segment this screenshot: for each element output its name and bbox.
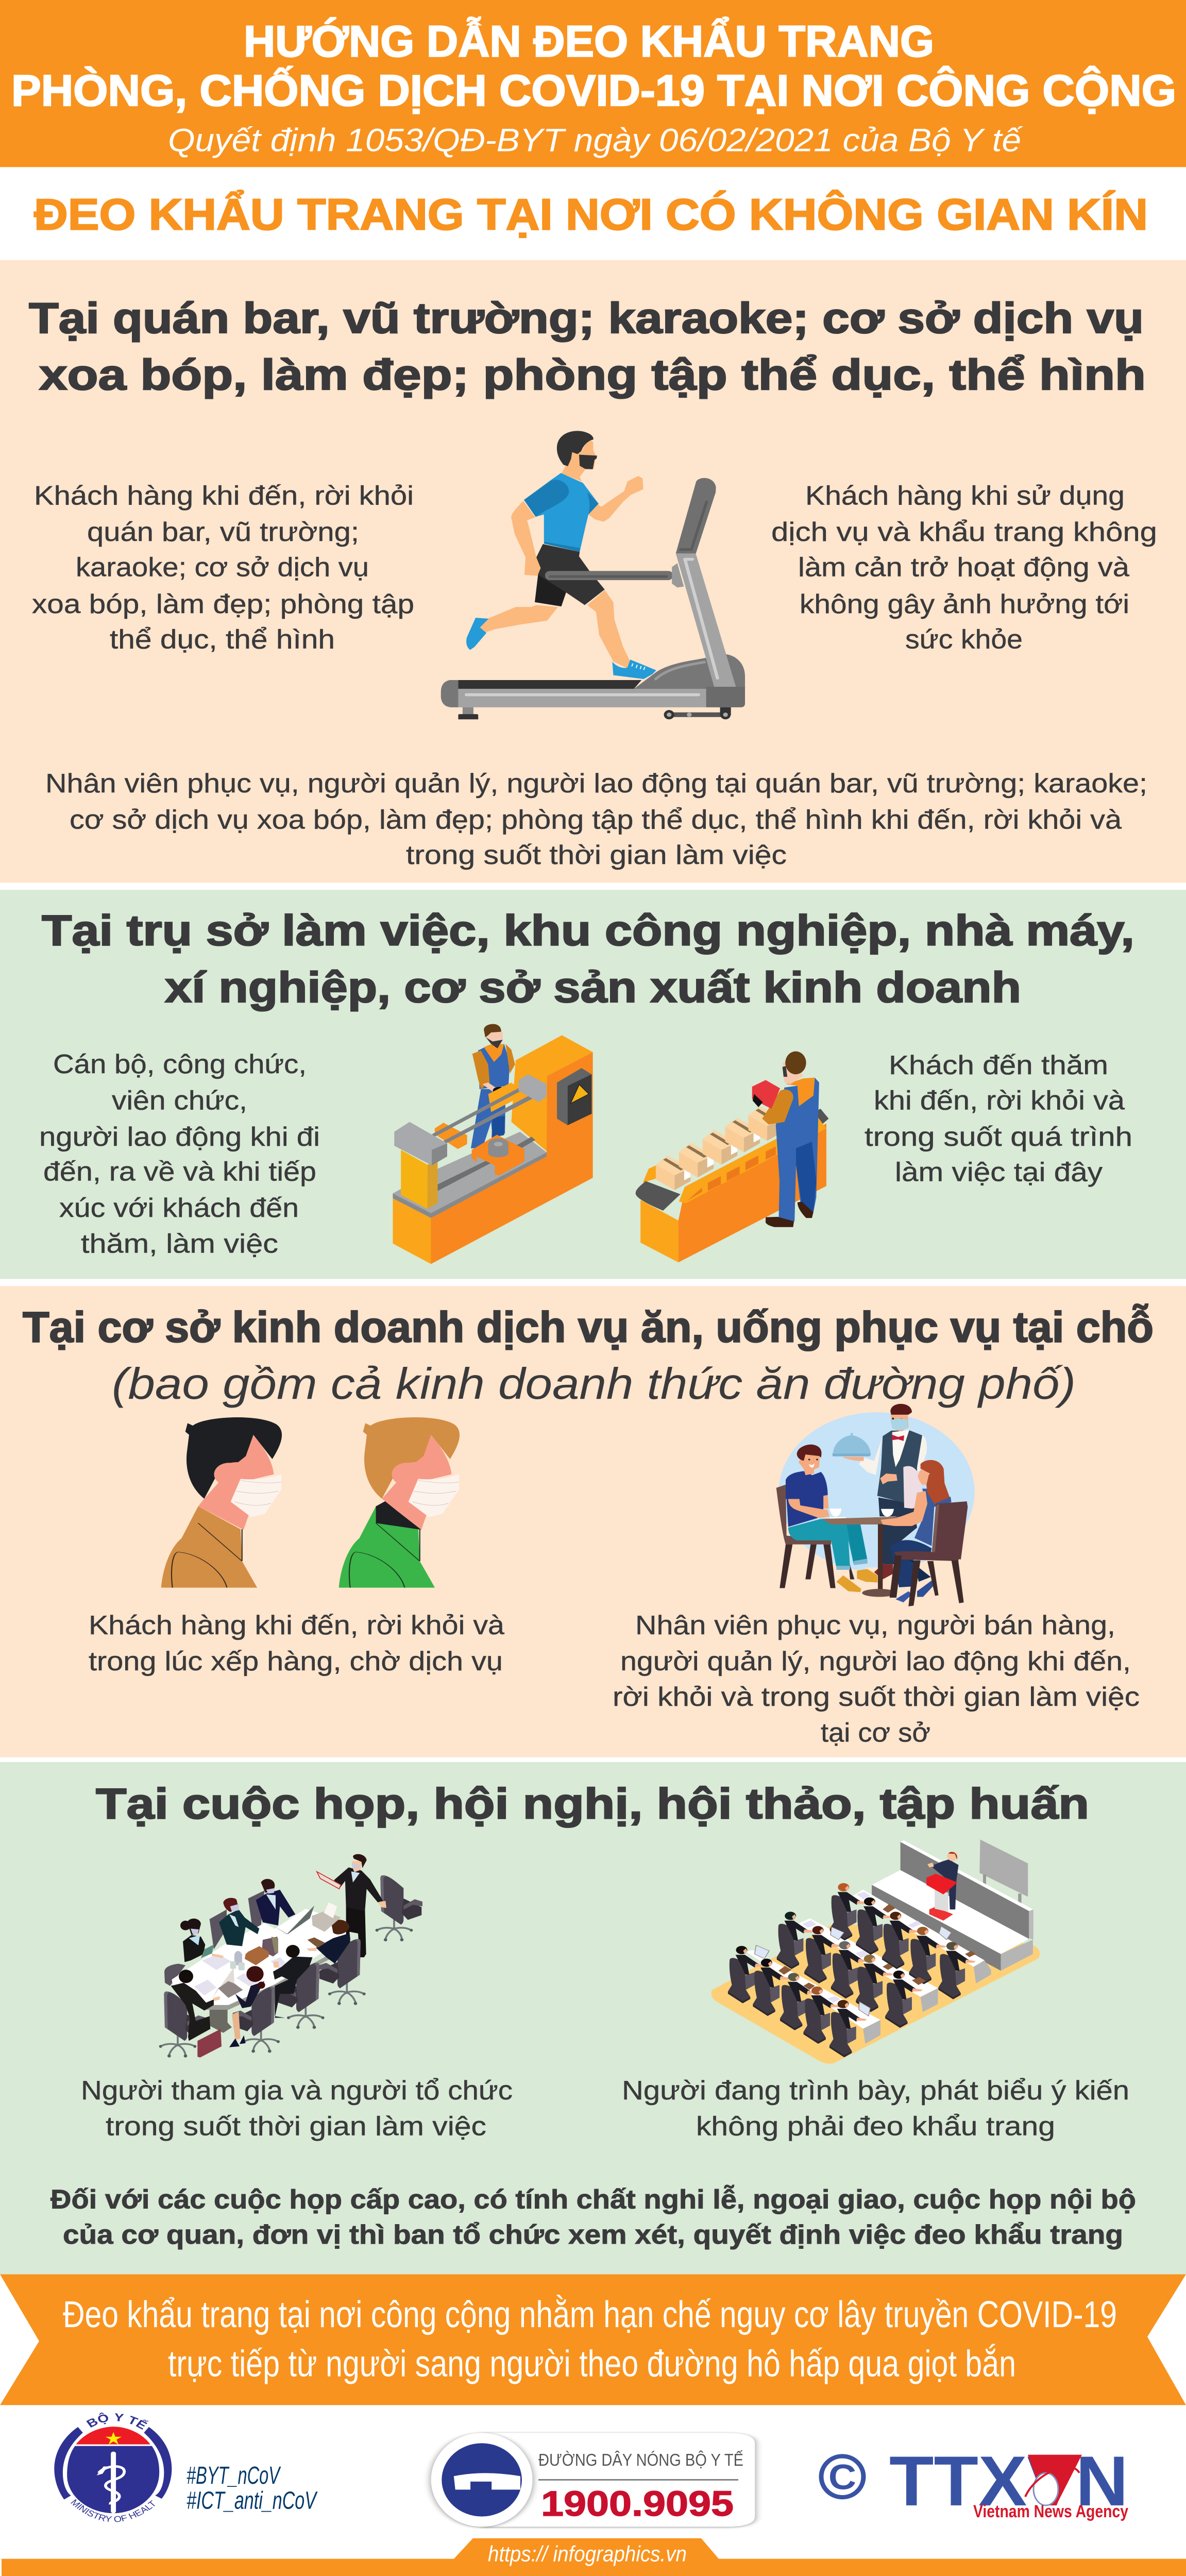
panel heading: Tại trụ sở làm việc, khu công nghiệp, nhà máy, [42,907,1134,955]
text block: participants: trong suốt thời gian làm việc [106,2112,486,2141]
panel heading [42,907,1134,1011]
text block: customers using services: làm cản trở hoạt động và [798,552,1130,582]
text block: staff: cơ sở dịch vụ xoa bóp, làm đẹp; phòng tập thể dục, thể hình khi đến, rời khỏi và [70,805,1122,835]
icon: TTXVN logo: TTXVN [889,2442,1128,2521]
text block: customers arriving: Khách hàng khi đến, rời khỏi [34,481,414,511]
text block: workers: thăm, làm việc [81,1229,278,1259]
hashtags: #ICT_anti_nCoV [187,2486,318,2514]
text block: workers: Cán bộ, công chức, [53,1049,307,1079]
text block: workers: xúc với khách đến [59,1193,299,1223]
text block: customers using services: Khách hàng khi sử dụng [805,481,1125,511]
text block: customers arriving: quán bar, vũ trường; [87,517,359,547]
callout: ribbon banner [0,2274,1186,2405]
text block: customers arriving: karaoke; cơ sở dịch vụ [76,552,369,582]
front tables [851,1890,985,1967]
title line one: HƯỚNG DẪN ĐEO KHẨU TRANG [244,16,934,66]
panel: offices and factories [0,890,1186,1279]
text block: customers arriving: xoa bóp, làm đẹp; phòng tập [32,589,414,619]
text block: workers: đến, ra về và khi tiếp [43,1157,316,1187]
panel: meetings and conferences [0,1762,1186,2274]
icon: machine operator and conveyor worker [393,1024,828,1264]
text block: participants: Người tham gia và người tổ chức [81,2076,513,2106]
callout: hotline [431,2433,755,2527]
text block: customers arriving: thể dục, thể hình [110,624,335,654]
text block: high-level meetings note [50,2184,1136,2250]
footer bar with website [2,2538,1186,2576]
hashtags [187,2462,318,2514]
panel heading: (bao gồm cả kinh doanh thức ăn đường phố) [112,1359,1076,1408]
panel heading: xí nghiệp, cơ sở sản xuất kinh doanh [165,963,1021,1011]
text block: visitors: trong suốt quá trình [865,1122,1132,1151]
text block: customers using services: dịch vụ và khẩu trang không [771,517,1157,547]
panel heading [29,294,1146,399]
text block: high-level meetings note: Đối với các cuộc họp cấp cao, có tính chất nghi lễ, ngoại giao, cuộc họp nội bộ [50,2184,1136,2214]
icon: man running on treadmill [441,431,745,719]
machine two [636,1052,828,1262]
icon: waiter and diners at a table [776,1404,975,1606]
text block: participants [81,2076,513,2141]
callout: hotline: ĐƯỜNG DÂY NÓNG BỘ Y TẾ [538,2450,743,2470]
text block: workers: người lao động khi đi [39,1122,320,1151]
icon: Ministry of Health logo: BỘ Y TẾ [86,2412,149,2430]
icon: two customers wearing masks [161,1417,460,1588]
panel heading: Tại quán bar, vũ trường; karaoke; cơ sở dịch vụ [29,294,1144,342]
text block: staff: Nhân viên phục vụ, người bán hàng, [635,1611,1115,1640]
text block: visitors: làm việc tại đây [895,1157,1103,1187]
icon: Ministry of Health logo: MINISTRY OF HEALTH [71,2499,155,2522]
panel heading: xoa bóp, làm đẹp; phòng tập thể dục, thể hình [39,351,1146,399]
row three of attendees [728,1946,766,2003]
text block: staff: Nhân viên phục vụ, người quản lý, người lao động tại quán bar, vũ trường; karaoke; [45,769,1147,799]
row one of attendees [830,1883,868,1940]
text block: visitors: khi đến, rời khỏi và [874,1086,1125,1115]
chairs and seated people [318,1939,366,2005]
icon: conference hall with speaker on stage [711,1840,1040,2064]
text block: staff: tại cơ sở [821,1718,930,1748]
text block: staff: người quản lý, người lao động khi đến, [620,1647,1131,1676]
panel heading: Tại cuộc họp, hội nghị, hội thảo, tập huấn [96,1780,1089,1828]
panel: food and drink services [0,1286,1186,1757]
hashtags: #BYT_nCoV [187,2462,281,2489]
text block: customers using services: sức khỏe [905,624,1023,654]
text block: presenters: không phải đeo khẩu trang [696,2112,1055,2141]
panel: bars and gyms [0,260,1186,883]
text block: customers: trong lúc xếp hàng, chờ dịch vụ [89,1647,503,1676]
icon: copyright mark: C [828,2458,856,2497]
text block: customers using services: không gây ảnh hưởng tới [800,589,1129,619]
icon: TTXVN logo: Vietnam News Agency [973,2501,1128,2521]
panel heading [23,1303,1154,1408]
text block: staff [45,769,1147,870]
table items [262,1937,278,1957]
text block: presenters [622,2076,1129,2141]
icon: copyright mark [821,2456,863,2497]
text block: workers: viên chức, [112,1086,247,1115]
callout: hotline: 1900.9095 [541,2484,734,2524]
row two of attendees [777,1912,814,1969]
text block: workers [39,1049,320,1259]
text block: staff: trong suốt thời gian làm việc [406,840,787,870]
text block: customers: Khách hàng khi đến, rời khỏi và [89,1611,505,1640]
panel: header banner [0,0,1186,167]
text block: customers [89,1611,505,1676]
text block: customers arriving [32,481,414,654]
machine one [393,1024,593,1264]
text block: customers using services [771,481,1157,654]
laptops and books on tables [755,1926,952,2016]
text block: staff: rời khỏi và trong suốt thời gian làm việc [613,1682,1140,1711]
text block: presenters: Người đang trình bày, phát biểu ý kiến [622,2076,1129,2106]
text block: visitors [865,1050,1132,1187]
section heading: enclosed spaces: ĐEO KHẨU TRANG TẠI NƠI CÓ KHÔNG GIAN KÍN [34,190,1148,239]
presenter [346,1906,366,1957]
subtitle: Quyết định 1053/QĐ-BYT ngày 06/02/2021 của Bộ Y tế [168,122,1024,158]
icon: people at a meeting table [159,1854,422,2058]
text block: visitors: Khách đến thăm [889,1050,1108,1080]
text block: high-level meetings note: của cơ quan, đơn vị thì ban tổ chức xem xét, quyết định việc đeo khẩu trang [63,2220,1123,2250]
text block: staff [613,1611,1140,1748]
people on the far side [183,1935,205,1962]
footer bar with website: https:// infographics.vn [488,2542,687,2566]
